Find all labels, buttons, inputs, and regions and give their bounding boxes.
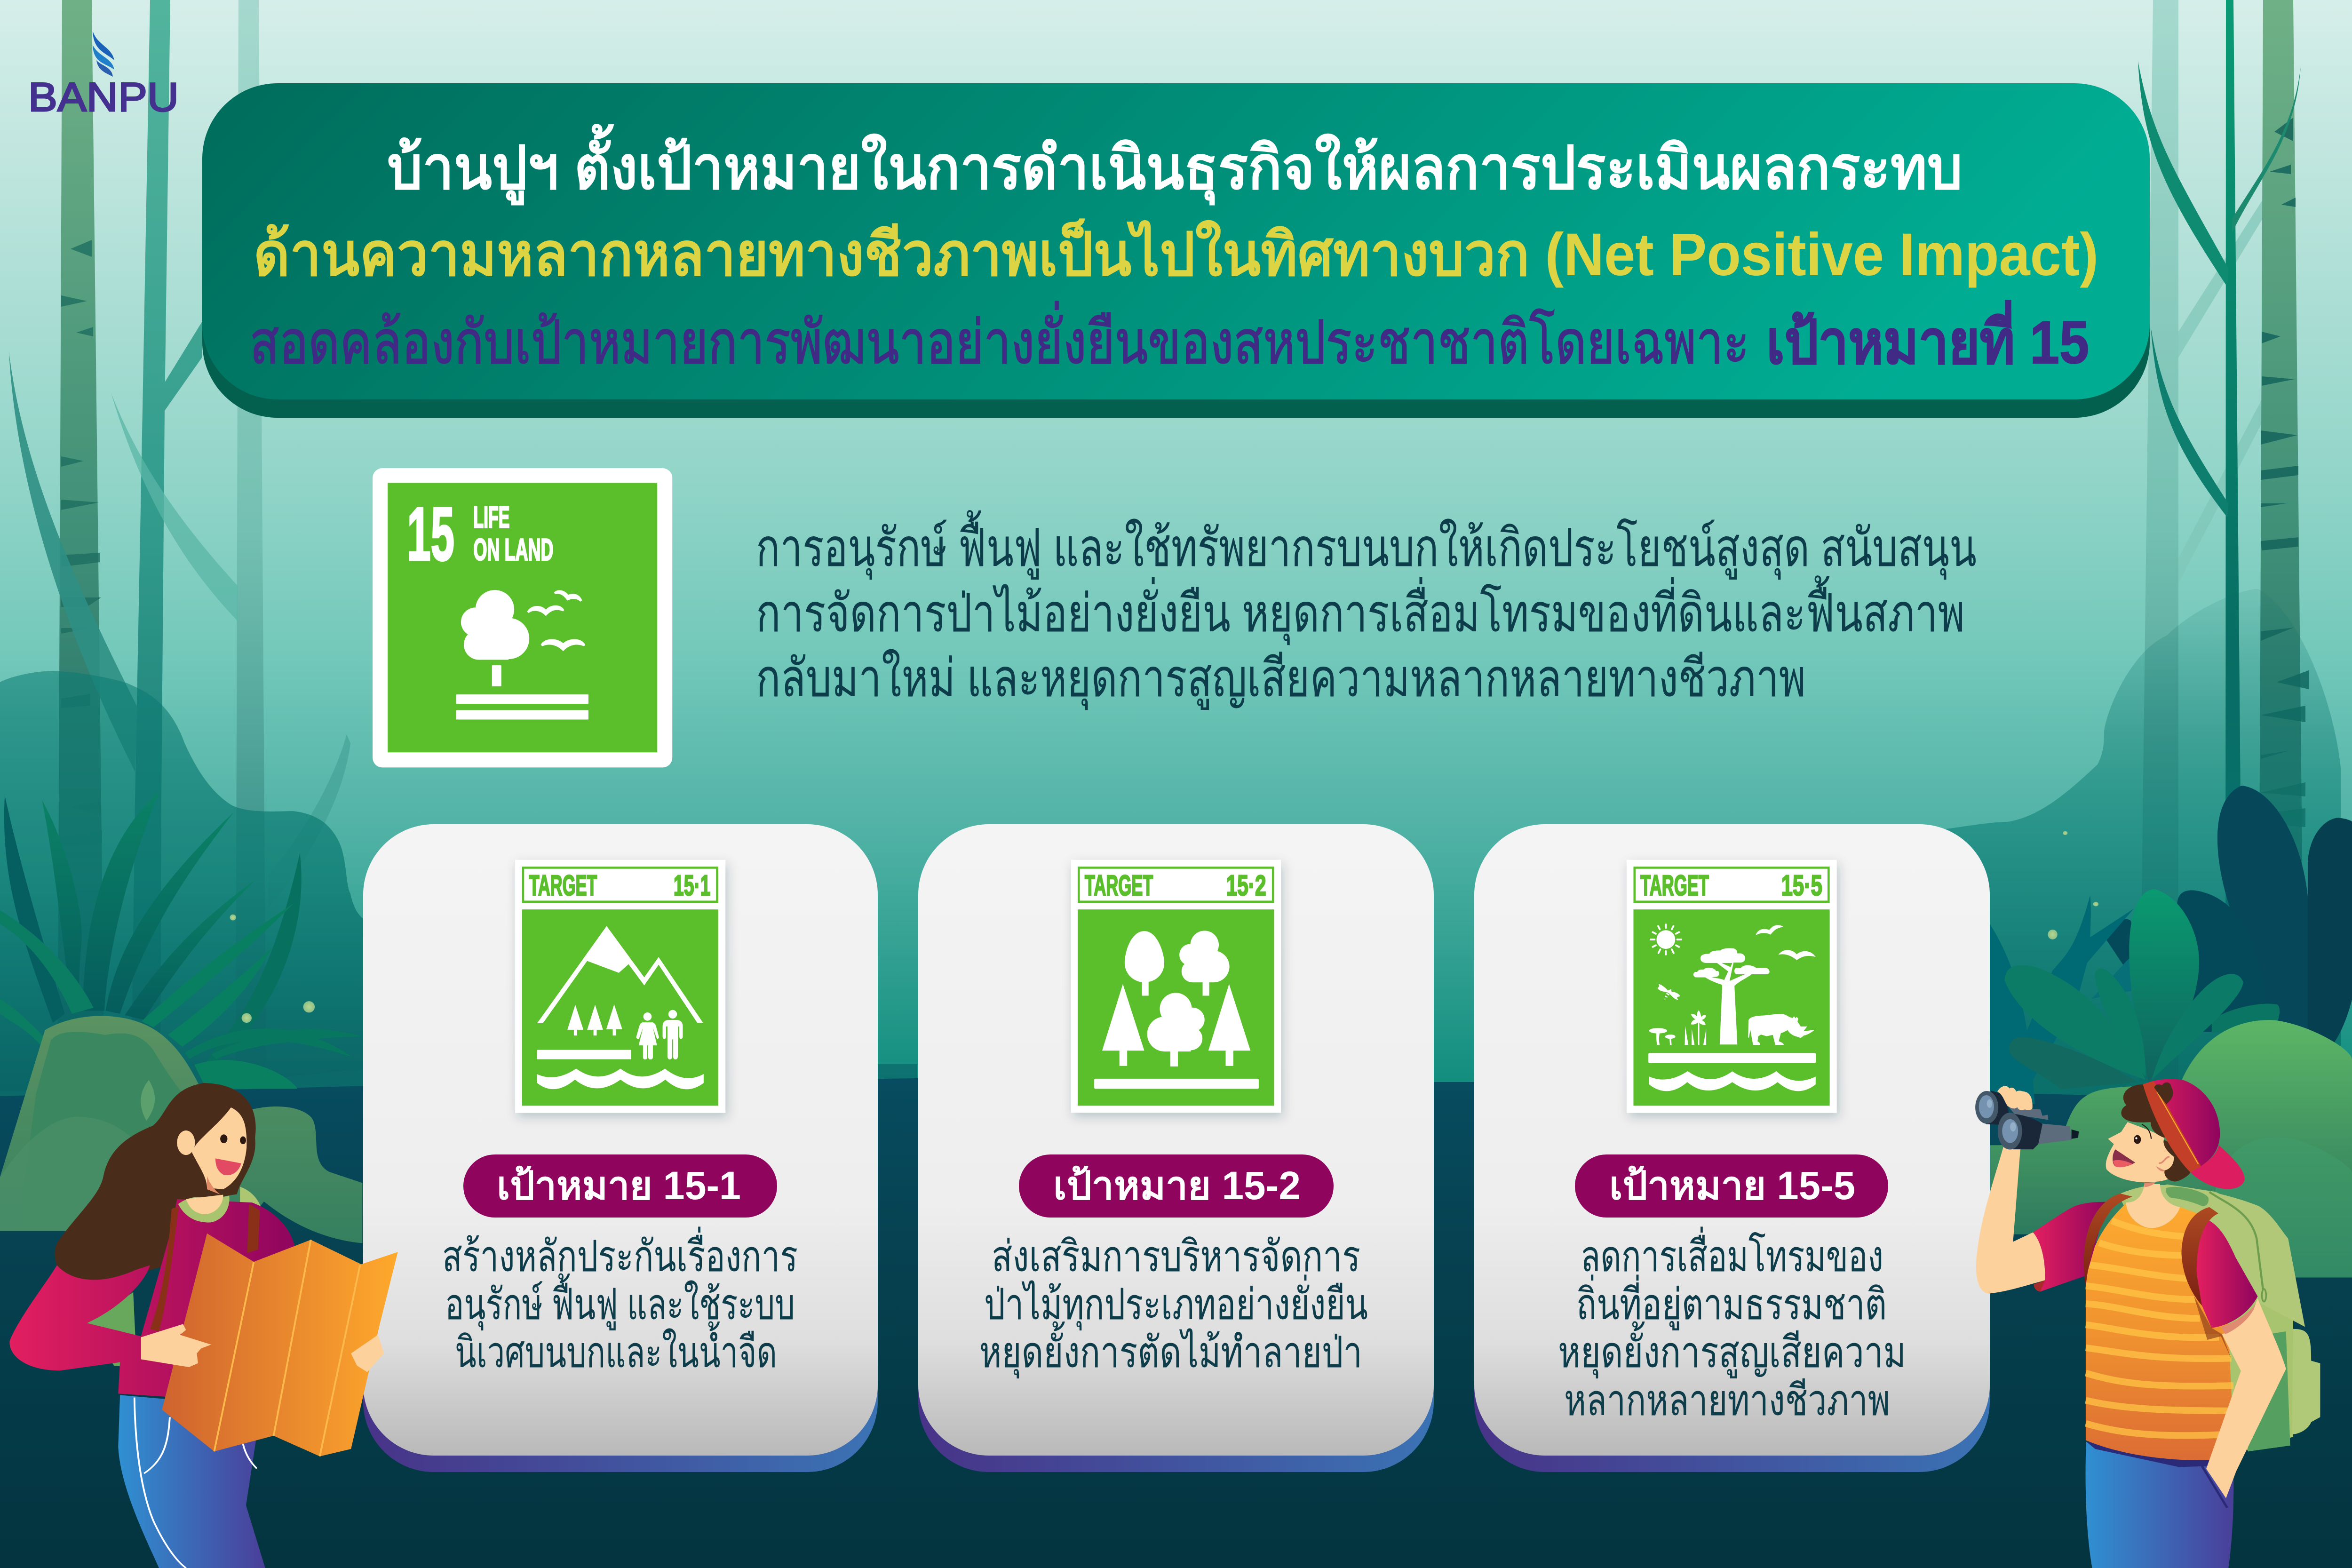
icon: target 15-5 habitat and wildlife xyxy=(1627,860,1837,1113)
icon: target 15-1 mountains, people and water: TARGET xyxy=(529,869,597,901)
hands xyxy=(141,1324,211,1367)
cap xyxy=(2143,1079,2220,1166)
description text: การจัดการป่าไม้อย่างยั่งยืน หยุดการเสื่อมโทรมของที่ดินและฟื้นสภาพ xyxy=(756,575,1965,645)
left hill xyxy=(0,671,365,1101)
SDG number and title: LIFE xyxy=(473,500,510,534)
text: target 15-2 description: หยุดยั้งการตัดไม้ทำลายป่า xyxy=(979,1321,1362,1379)
logo flame xyxy=(93,31,114,77)
text: target 15-5 description xyxy=(1558,1226,1906,1425)
tree and birds xyxy=(456,590,588,719)
badge: target 15-2 xyxy=(1019,1154,1334,1218)
logo wordmark: BANPU xyxy=(28,75,179,120)
dark ground xyxy=(0,1064,2352,1568)
badge: target 15-1 xyxy=(463,1154,777,1218)
neck xyxy=(2126,1184,2180,1228)
straps xyxy=(2084,1194,2132,1287)
text: target 15-2 description xyxy=(979,1233,1368,1379)
header line 3: เป้าหมายที่ 15 xyxy=(1766,300,2089,376)
right bamboo stalks xyxy=(2138,0,2309,1082)
jeans xyxy=(118,1395,265,1568)
icon: target 15-2 trees xyxy=(1071,860,1281,1113)
illustration: hiker with binoculars xyxy=(1975,1079,2320,1568)
description text xyxy=(756,510,1977,710)
striped shirt xyxy=(2086,1203,2234,1460)
right green bush xyxy=(1990,831,2352,1277)
text: target 15-1 description xyxy=(442,1226,798,1377)
icon: target 15-1 mountains, people and water: 15·1 xyxy=(674,869,710,901)
text: target 15-5 description: หลากหลายทางชีวภาพ xyxy=(1564,1377,1890,1425)
map xyxy=(162,1234,398,1457)
description text: กลับมาใหม่ และหยุดการสูญเสียความหลากหลายทางชีวภาพ xyxy=(756,649,1806,710)
panel: target 15-2 xyxy=(918,824,1434,1472)
SDG 15 icon xyxy=(373,468,672,767)
eye and brow xyxy=(2134,1135,2141,1144)
lower backpack and jeans xyxy=(2086,1185,2320,1568)
hand in pocket line xyxy=(2202,1466,2227,1508)
badge: target 15-1: เป้าหมาย 15-1 xyxy=(497,1163,741,1208)
header line 3: สอดคล้องกับเป้าหมายการพัฒนาอย่างยั่งยืนของสหประชาชาติโดยเฉพาะ xyxy=(250,301,1749,376)
icon: target 15-2 trees: TARGET xyxy=(1085,869,1153,901)
SDG number and title: ON LAND xyxy=(473,532,553,566)
text: target 15-1 description: อนุรักษ์ ฟื้นฟู และใช้ระบบ xyxy=(445,1273,795,1331)
illustration: woman holding a map xyxy=(9,1083,398,1568)
text: target 15-2 description: ส่งเสริมการบริหารจัดการ xyxy=(992,1233,1360,1281)
hiker upper body xyxy=(1975,1079,2305,1498)
SDG number and title: 15 xyxy=(407,492,454,576)
SDG number and title xyxy=(407,492,553,576)
raised arm xyxy=(1976,1146,2045,1294)
badge: target 15-2: เป้าหมาย 15-2 xyxy=(1053,1163,1301,1208)
ear xyxy=(2157,1154,2174,1170)
right hill xyxy=(1835,589,2341,1101)
backpack patch xyxy=(87,1292,137,1368)
text: target 15-5 description: ลดการเสื่อมโทรมของ xyxy=(1581,1226,1883,1281)
Banpu logo xyxy=(28,31,179,120)
text: target 15-5 description: ถิ่นที่อยู่ตามธรรมชาติ xyxy=(1576,1274,1887,1330)
text: target 15-5 description: หยุดยั้งการสูญเสียความ xyxy=(1558,1321,1906,1379)
icon: target 15-1 mountains, people and water xyxy=(515,860,725,1113)
collar xyxy=(178,1196,230,1223)
sleeves xyxy=(2033,1202,2107,1291)
text: target 15-2 description: ป่าไม้ทุกประเภทอย่างยั่งยืน xyxy=(984,1274,1368,1331)
hair xyxy=(2121,1084,2166,1138)
panel: target 15-1 xyxy=(363,824,878,1472)
hand xyxy=(1997,1086,2033,1110)
right dark foliage xyxy=(1990,786,2352,1104)
left foliage xyxy=(0,792,361,1089)
badge: target 15-5: เป้าหมาย 15-5 xyxy=(1609,1163,1855,1208)
hair back xyxy=(55,1083,256,1283)
left green bush xyxy=(0,1016,362,1243)
icon: target 15-5 habitat and wildlife: TARGET xyxy=(1640,869,1709,901)
panel: target 15-5 xyxy=(1474,824,1990,1472)
text: target 15-1 description: นิเวศบนบกและในน้ำจืด xyxy=(455,1321,777,1377)
mouth xyxy=(2113,1149,2135,1167)
face xyxy=(192,1107,246,1189)
text: target 15-1 description: สร้างหลักประกันเรื่องการ xyxy=(442,1226,798,1281)
binoculars xyxy=(2009,1107,2048,1120)
straps xyxy=(150,1204,260,1331)
icon: target 15-2 trees: 15·2 xyxy=(1226,869,1266,901)
header banner xyxy=(202,83,2150,418)
description text: การอนุรักษ์ ฟื้นฟู และใช้ทรัพยากรบนบกให้เกิดประโยชน์สูงสุด สนับสนุน xyxy=(756,510,1977,580)
badge: target 15-5 xyxy=(1575,1154,1888,1218)
header line 1: บ้านปูฯ ตั้งเป้าหมายในการดำเนินธุรกิจให้ผลการประเมินผลกระทบ xyxy=(387,124,1963,206)
shirt xyxy=(9,1199,295,1402)
icon: target 15-5 habitat and wildlife: 15·5 xyxy=(1781,869,1822,901)
left bamboo stalks xyxy=(9,0,350,1082)
header line 2: ด้านความหลากหลายทางชีวภาพเป็นไปในทิศทางบวก (Net Positive Impact) xyxy=(254,218,2098,288)
face xyxy=(2106,1122,2174,1182)
